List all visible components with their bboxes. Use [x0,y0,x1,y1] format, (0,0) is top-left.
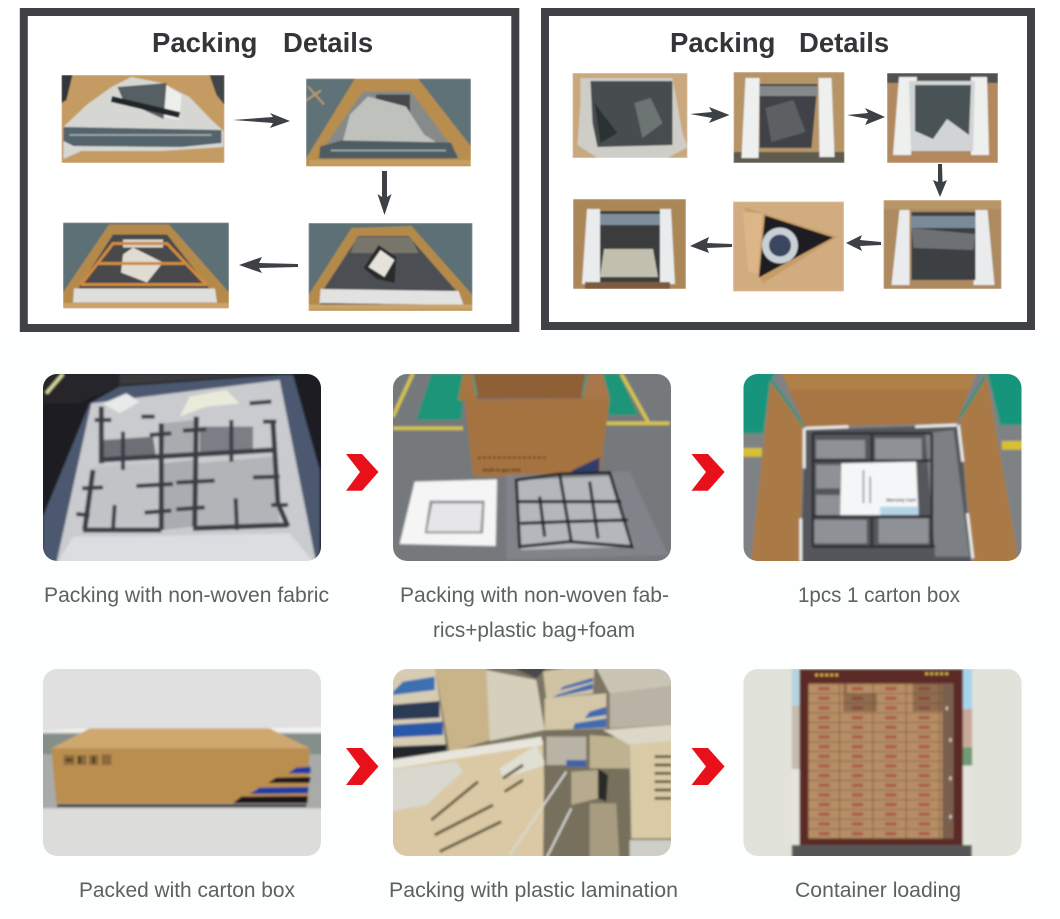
caption: 1pcs 1 carton box [798,584,960,607]
arrow: right step 1 to 2 [690,107,730,123]
caption: Container loading [795,879,961,902]
photo: open carton with grate and booklet [744,374,1022,561]
panel: left packing details frame [24,12,515,328]
step 1: non-woven fabric [40,370,340,607]
photo: stacks of laminated boxes [393,669,671,856]
step 5: plastic lamination [389,665,690,902]
photo: open carton with grate and booklet: Warranty Card [886,497,916,502]
panel: right packing details frame [545,12,1031,326]
heading: right Packing Details: Details [799,27,889,58]
caption: Packing with plastic lamination [389,879,678,902]
photo: carton foam and grate: Built-in gas hob [483,468,521,474]
photo: top view of carton with foam [884,200,1002,289]
photo: hood wrapped in plastic [62,75,224,163]
step 6: container loading [740,665,1040,902]
photo: sealed carton box [43,669,321,856]
photo: panel in plastic on carton [572,73,688,158]
caption: Packing with non-woven fab- [400,584,669,607]
arrow: right step 2 to 3 [847,108,885,125]
heading: left Packing Details: Details [283,27,373,58]
photo: carton foam and grate [393,374,671,561]
step 2: fabric, plastic bag and foam [390,370,690,642]
panel: six-step packing process [40,370,1040,902]
chevron arrow 4 [692,748,725,785]
arrow: step 2 to step 3 [378,171,392,215]
photo: container full of cartons [744,669,1022,856]
photo: foam and wood frame in carton [63,222,229,308]
chevron arrow 1 [346,454,378,491]
step 4: carton box [43,669,321,897]
arrow: right step 3 to 4 [933,164,947,197]
photo: grate in non-woven fabric [43,374,321,561]
arrow: step 3 to step 4 [239,257,298,273]
step 3: one piece one carton [740,370,1040,607]
photo: hose coil on folded carton flap [733,202,844,292]
heading: left Packing Details: Packing [152,27,257,58]
caption continuation: rics+plastic bag+foam [433,619,635,642]
photo: panel with foam side supports [734,72,844,163]
arrow: step 1 to step 2 [233,113,290,128]
chevron arrow 2 [692,454,725,491]
photo: plastic over panel and foam [887,73,998,163]
photo: accessories added in carton [308,223,472,311]
heading: right Packing Details: Packing [670,27,775,58]
arrow: right step 4 to 5 [846,235,881,251]
photo: hood in open carton [306,78,471,166]
caption: Packing with non-woven fabric [44,584,329,607]
caption: Packed with carton box [79,879,295,902]
chevron arrow 3 [346,748,378,785]
arrow: right step 5 to 6 [690,237,732,253]
photo: completed carton with accessories [573,199,686,289]
